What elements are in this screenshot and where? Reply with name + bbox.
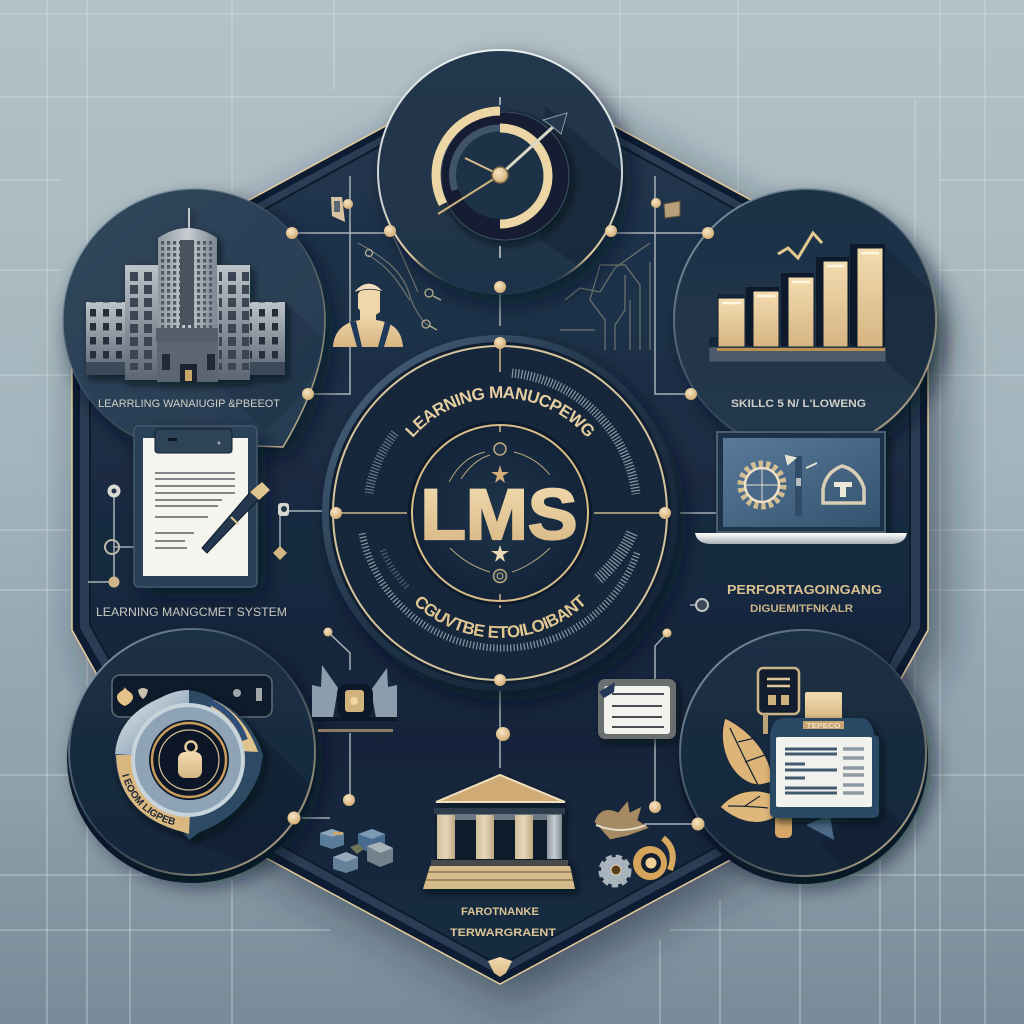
icon: temple	[423, 775, 575, 889]
icons: small magnifiers	[366, 250, 441, 330]
icon: pen	[202, 482, 270, 553]
tick ring decoration	[362, 373, 637, 648]
circuit traces	[358, 233, 650, 350]
icon: small factory shelf	[312, 665, 397, 732]
icon: lock tabs	[112, 675, 272, 717]
icon: small tool right	[664, 201, 680, 218]
icon: star bottom	[491, 545, 509, 562]
curved heading: top: LEARNING MANUCPEWG	[404, 386, 594, 438]
icon: laptop	[695, 432, 907, 544]
icon: stacked cubes	[320, 829, 393, 873]
panel: central LMS dial	[316, 335, 700, 714]
LMS core	[408, 421, 592, 605]
panel: top-right chart circle	[674, 189, 940, 451]
label: chart caption: SKILLC 5 N/ L'LOWENG	[731, 398, 866, 410]
connector lines	[88, 176, 717, 824]
panel: bottom-left lock circle	[63, 628, 330, 898]
icon: screen gear	[742, 465, 782, 505]
icons: clipboard side markers	[105, 484, 289, 588]
bar chart	[709, 233, 886, 362]
icon: star top	[491, 465, 509, 483]
label: left building caption: LEARRLING WANAIUGIP &PBEEOT	[98, 398, 280, 410]
connector nodes	[286, 198, 714, 830]
label: lock badge: I EOOM LIGPEB	[122, 774, 175, 825]
label: temple caption line 2: TERWARGRAENT	[450, 927, 556, 939]
icon: gold leaves	[720, 718, 792, 838]
icon: ornament and gears	[594, 800, 673, 885]
label: temple caption line 1: FAROTNANKE	[461, 906, 539, 918]
icon: speech tail	[806, 815, 834, 840]
icon: document form: TEPECO	[806, 723, 841, 730]
icon: building	[86, 208, 285, 382]
icon: gold tab	[805, 692, 842, 720]
label: laptop caption line 1: PERFORTAGOINGANG	[727, 582, 882, 597]
icon: document form	[770, 718, 879, 818]
icon: lock dial	[115, 690, 263, 840]
icon: clipboard	[134, 426, 270, 587]
label: laptop caption line 2: DIGUEMITFNKALR	[750, 603, 853, 615]
label: clipboard caption: LEARNING MANGCMET SYSTEM	[96, 607, 287, 619]
panel: top gauge circle	[378, 50, 630, 300]
icon: note card	[598, 679, 676, 739]
hexagon main panel	[72, 64, 928, 984]
curved heading: bottom: CGUVTBE ETOILOIBANT	[416, 594, 584, 638]
icon: small tool left	[331, 197, 345, 222]
icon: shield	[488, 957, 512, 977]
icon: gauge	[436, 97, 570, 258]
LMS title: LMS	[420, 476, 578, 555]
icon: person	[333, 283, 403, 347]
icon: screen helmet	[823, 466, 864, 503]
panel: top-left building circle	[63, 189, 330, 451]
panel: bottom-right document circle	[678, 630, 930, 890]
icon: small lens	[696, 599, 708, 611]
icon: list sign	[758, 668, 799, 734]
